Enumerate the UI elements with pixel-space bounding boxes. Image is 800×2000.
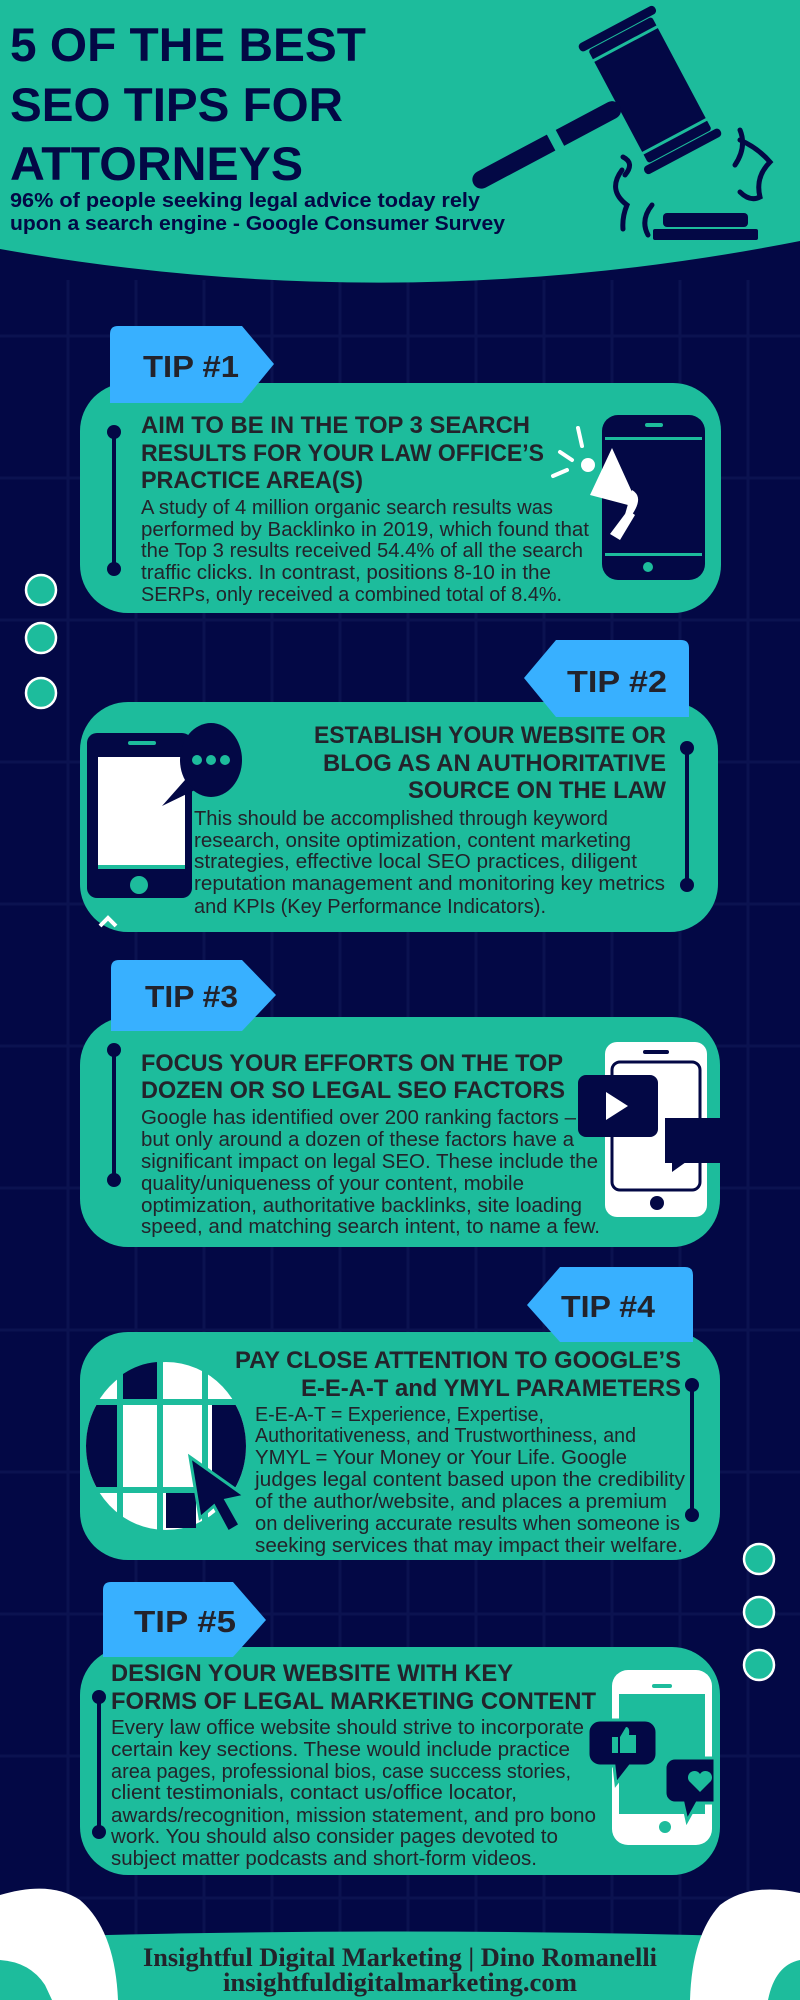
heading 2: ESTABLISH YOUR WEBSITE OR xyxy=(314,722,666,749)
decorative circles right xyxy=(744,1544,774,1680)
icon: phone with megaphone xyxy=(553,415,705,580)
heading 2: BLOG AS AN AUTHORITATIVE xyxy=(323,750,666,777)
panel: tip 1 xyxy=(80,326,721,613)
heading 5 xyxy=(111,1660,596,1715)
decorative circles left xyxy=(26,575,56,708)
body 4 xyxy=(254,1404,685,1557)
heading 1: PRACTICE AREA(S) xyxy=(141,467,363,494)
tag: tip 5 xyxy=(103,1582,266,1657)
footer text: insightfuldigitalmarketing.com xyxy=(223,1968,577,1997)
tag: tip 3 xyxy=(111,960,276,1031)
body 5: client testimonials, contact us/office locator, xyxy=(111,1782,517,1804)
panel: tip 3 xyxy=(80,960,720,1247)
card 2 xyxy=(80,702,718,932)
card 4 xyxy=(80,1332,720,1560)
heading 3: FOCUS YOUR EFFORTS ON THE TOP xyxy=(141,1050,563,1077)
tag: tip 4: TIP #4 xyxy=(561,1289,656,1324)
title xyxy=(10,18,366,190)
tag: tip 4 xyxy=(527,1267,693,1342)
body 3: speed, and matching search intent, to name a few. xyxy=(141,1216,600,1238)
body 5: subject matter podcasts and short-form videos. xyxy=(111,1848,537,1870)
body 2: research, onsite optimization, content marketing xyxy=(194,830,631,852)
body 5 xyxy=(110,1717,596,1870)
body 1: A study of 4 million organic search results was xyxy=(141,497,553,519)
marker line xyxy=(685,1378,699,1522)
icon: phone with video xyxy=(578,1042,720,1217)
panel: tip 2 xyxy=(80,640,718,932)
decorative white blob right xyxy=(690,1889,800,2000)
heading 3: DOZEN OR SO LEGAL SEO FACTORS xyxy=(141,1077,565,1104)
subtitle: upon a search engine - Google Consumer Survey xyxy=(10,213,506,235)
body 5: work. You should also consider pages devoted to xyxy=(110,1826,558,1848)
body 4: on delivering accurate results when someone is xyxy=(255,1513,680,1535)
body 1 xyxy=(141,497,589,606)
body 1: SERPs, only received a combined total of 8.4%. xyxy=(141,584,562,606)
heading 5: DESIGN YOUR WEBSITE WITH KEY xyxy=(111,1660,513,1687)
icon: gavel xyxy=(439,4,770,249)
heading 5: FORMS OF LEGAL MARKETING CONTENT xyxy=(111,1688,596,1715)
body 4: Authoritativeness, and Trustworthiness, and xyxy=(255,1425,636,1447)
marker line xyxy=(680,741,694,892)
body 2: and KPIs (Key Performance Indicators). xyxy=(194,896,546,918)
heading 2: SOURCE ON THE LAW xyxy=(408,777,666,804)
body 4: seeking services that may impact their welfare. xyxy=(255,1535,683,1557)
icon: globe with cursor xyxy=(84,1360,248,1532)
body 2: This should be accomplished through keyword xyxy=(194,808,608,830)
body 3: significant impact on legal SEO. These include the xyxy=(141,1151,598,1173)
tag: tip 1 xyxy=(110,326,274,403)
body 4: E-E-A-T = Experience, Expertise, xyxy=(255,1404,544,1426)
footer text xyxy=(143,1943,657,1997)
body 1: performed by Backlinko in 2019, which found that xyxy=(141,519,589,541)
body 3 xyxy=(141,1107,600,1238)
body 1: the Top 3 results received 54.4% of all the search xyxy=(141,540,583,562)
body 5: awards/recognition, mission statement, and pro bono xyxy=(111,1805,596,1827)
tag: tip 1: TIP #1 xyxy=(143,349,239,384)
subtitle: 96% of people seeking legal advice today rely xyxy=(10,190,481,212)
body 4: of the author/website, and places a premium xyxy=(255,1491,667,1513)
heading 3 xyxy=(141,1050,565,1104)
body 3: optimization, authoritative backlinks, site loading xyxy=(141,1195,582,1217)
body 5: Every law office website should strive to incorporate xyxy=(111,1717,584,1739)
tag: tip 2 xyxy=(524,640,689,717)
title: ATTORNEYS xyxy=(10,137,303,190)
heading 4: PAY CLOSE ATTENTION TO GOOGLE’S xyxy=(235,1347,681,1374)
title: SEO TIPS FOR xyxy=(10,78,343,131)
subtitle xyxy=(10,190,506,235)
decorative white blob left xyxy=(0,1889,118,2000)
body 3: quality/uniqueness of your content, mobile xyxy=(141,1173,524,1195)
card 1 xyxy=(80,383,721,613)
heading 4: E-E-A-T and YMYL PARAMETERS xyxy=(301,1375,681,1402)
icon: phone with chat bubble xyxy=(87,723,242,926)
marker line xyxy=(107,1043,121,1187)
tag: tip 2: TIP #2 xyxy=(567,664,667,699)
heading 1: AIM TO BE IN THE TOP 3 SEARCH xyxy=(141,412,530,439)
tag: tip 5: TIP #5 xyxy=(134,1604,236,1639)
footer xyxy=(0,1889,800,2000)
card 3 xyxy=(80,1017,720,1247)
body 4: judges legal content based upon the credibility xyxy=(254,1469,685,1491)
body 4: YMYL = Your Money or Your Life. Google xyxy=(255,1447,627,1469)
body 2: strategies, effective local SEO practices, diligent xyxy=(194,851,637,873)
title: 5 OF THE BEST xyxy=(10,18,366,71)
marker line xyxy=(92,1690,106,1839)
header panel xyxy=(0,0,800,283)
body 5: certain key sections. These would include practice xyxy=(111,1739,570,1761)
heading 4 xyxy=(235,1347,681,1402)
tag: tip 3: TIP #3 xyxy=(145,979,238,1014)
panel: tip 5 xyxy=(80,1582,720,1875)
icon: phone with social bubbles xyxy=(588,1670,715,1845)
body 3: Google has identified over 200 ranking factors – xyxy=(141,1107,577,1129)
footer text: Insightful Digital Marketing | Dino Romanelli xyxy=(143,1943,657,1972)
marker line xyxy=(107,425,121,576)
panel: tip 4 xyxy=(80,1267,720,1560)
body 3: but only around a dozen of these factors have a xyxy=(141,1129,575,1151)
heading 1: RESULTS FOR YOUR LAW OFFICE’S xyxy=(141,440,544,467)
body 2 xyxy=(194,808,665,918)
heading 1 xyxy=(141,412,544,494)
body 1: traffic clicks. In contrast, positions 8-10 in the xyxy=(141,562,551,584)
body 2: reputation management and monitoring key metrics xyxy=(194,873,665,895)
body 5: area pages, professional bios, case success stories, xyxy=(111,1761,571,1783)
heading 2 xyxy=(314,722,666,804)
card 5 xyxy=(80,1647,720,1875)
